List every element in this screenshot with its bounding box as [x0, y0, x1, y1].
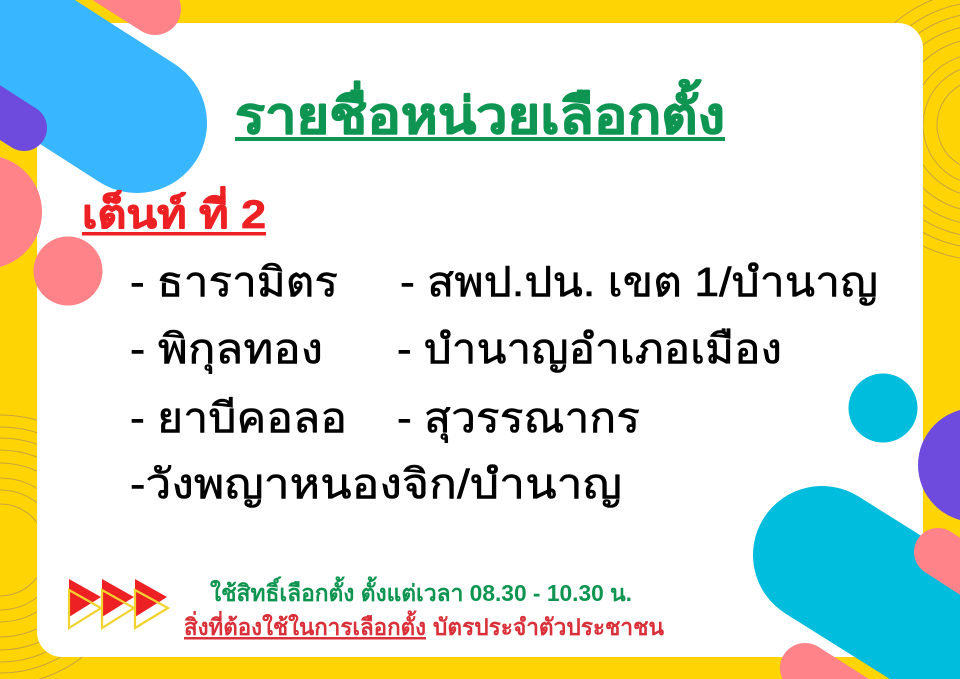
list of polling stations: - สุวรรณากร: [397, 395, 640, 443]
list of polling stations: - ธารามิตร: [130, 259, 338, 305]
footer: what to bring: บัตรประจำตัวประชาชน: [433, 614, 664, 640]
heading: tent 2: เต็นท์ ที่ 2: [82, 186, 266, 237]
decoration: top left shapes: [0, 0, 155, 306]
list of polling stations: [130, 259, 878, 507]
list of polling stations: - ยาบีคอลอ: [130, 395, 347, 441]
list of polling stations: - สพป.ปน. เขต 1/บำนาญ: [400, 259, 878, 305]
icon: triple arrows: [69, 579, 168, 628]
list of polling stations: -วังพญาหนองจิก/บำนาญ: [130, 461, 622, 507]
footer: what to bring: สิ่งที่ต้องใช้ในการเลือกตั้ง: [184, 610, 426, 640]
list of polling stations: - พิกุลทอง: [130, 326, 323, 374]
footer: voting time: ใช้สิทธิ์เลือกตั้ง ตั้งแต่เวลา 08.30 - 10.30 น.: [210, 576, 632, 606]
title: รายชื่อหน่วยเลือกตั้ง: [235, 79, 725, 144]
decoration: bottom right shapes: [805, 374, 960, 679]
list of polling stations: - บำนาญอำเภอเมือง: [397, 326, 782, 372]
footer: what to bring: [184, 610, 664, 640]
